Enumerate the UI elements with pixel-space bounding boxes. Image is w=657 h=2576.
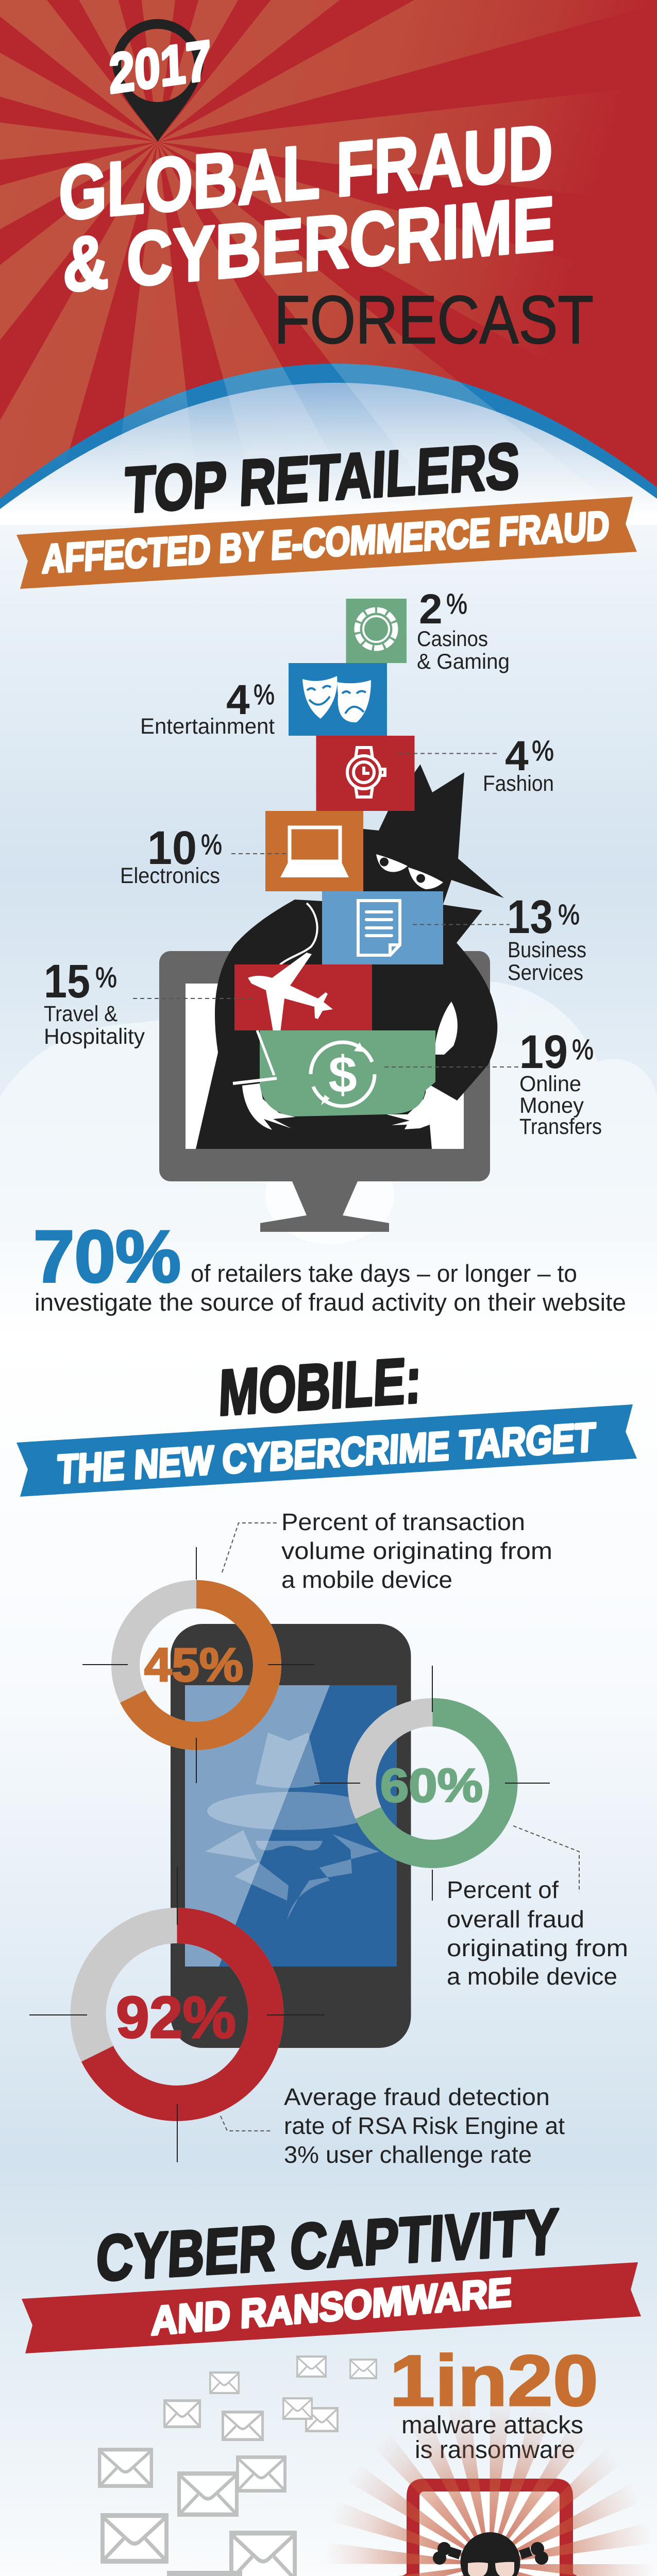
stat: 70 percent: 70% [33,1216,181,1298]
stat: fashion: % [532,734,554,767]
stat: travel: Hospitality [44,1024,145,1049]
stat: online money: Money [519,1093,584,1118]
title: GLOBAL FRAUD [59,109,553,236]
box: travel [234,953,372,1037]
icon: spy on phone screen [205,1733,379,1920]
stat: online money: 19 [519,1026,568,1078]
stat: business services: % [558,898,580,930]
callout: 60 percent: overall fraud [447,1906,584,1933]
callout: 92 percent: rate of RSA Risk Engine at [284,2112,565,2139]
donut: 60 percent: 60% [380,1759,483,1812]
stat: travel: Travel & [44,1002,117,1026]
stat: online money: % [572,1033,594,1065]
arc: blue dome [0,364,657,509]
box: casinos [346,599,407,663]
stat: casinos [417,586,510,673]
stat: electronics: 10 [147,822,197,874]
stat: fashion: Fashion [483,771,554,796]
stat: casinos: & Gaming [417,649,510,673]
stat: entertainment [140,676,275,739]
stat: casinos: Casinos [417,626,488,651]
header: red sunburst [0,0,657,499]
box: business services [322,891,443,964]
box: entertainment [289,663,387,736]
icon: laptop [280,827,349,877]
stat: business services: Business [508,938,586,962]
stat: casinos: % [446,587,467,620]
icon: ransomware envelope [375,2479,604,2576]
heading: top retailers: TOP RETAILERS [123,430,521,527]
callout: 60 percent: Percent of [447,1876,559,1903]
icon: location pin [112,19,204,142]
stat: 70 percent: investigate the source of fraud activity on their website [35,1289,626,1316]
stat: 70 percent: of retailers take days – or longer – to [191,1260,577,1287]
icon: theatre masks [302,676,371,722]
donut: 60 percent [314,1666,550,1901]
donut: 45 percent: 45% [144,1639,243,1691]
burst rays [407,2482,572,2576]
heading: mobile: MOBILE: [217,1344,423,1429]
callout: 60 percent: a mobile device [447,1963,617,1990]
stat: business services [507,891,586,985]
donut: 92 percent: 92% [116,1985,236,2050]
icon: airplane [248,953,333,1037]
stat: entertainment: 4 [226,676,250,723]
callout: 45 percent: Percent of transaction [281,1509,525,1535]
stat: travel [44,955,145,1049]
title: & CYBERCRIME [63,181,555,308]
clouds behind monitor [0,981,657,1244]
box: online money transfers [233,1030,435,1116]
icon: casino chip [357,610,395,648]
callout: 92 percent: Average fraud detection [284,2083,550,2110]
icon: watch [347,748,385,797]
stat: entertainment: Entertainment [140,714,275,739]
title [59,109,594,358]
callout: 45 percent: a mobile device [281,1566,452,1593]
stat: online money: Online [519,1072,581,1096]
swarm of envelopes [53,2357,417,2576]
icon: dollar cycle: $ [328,1046,357,1104]
box: fashion [316,736,414,811]
stat: 1 in 20: 1in20 [390,2340,598,2421]
stat: fashion: 4 [505,733,529,779]
stat: entertainment: % [254,678,275,710]
stat: electronics: Electronics [120,863,220,888]
leader lines: retailers [133,753,524,1067]
stat: travel: % [95,961,117,993]
stat: electronics [120,822,222,888]
stat: 1 in 20: malware attacks [401,2412,583,2439]
callout: 45 percent [222,1509,552,1593]
stat: casinos: 2 [419,586,443,633]
stat: travel: 15 [44,955,90,1008]
monitor [159,951,490,1232]
stat: 1 in 20: is ransomware [415,2436,575,2464]
stat: electronics: % [201,828,222,860]
icon: skull and crossbones [433,2532,548,2576]
stat: online money: Transfers [519,1114,602,1139]
callout: 92 percent: 3% user challenge rate [284,2141,532,2168]
callout: 45 percent: volume originating from [281,1537,552,1564]
stat: online money [519,1026,602,1139]
callout: 60 percent [447,1826,628,1990]
stat: 70 percent [33,1216,626,1316]
ribbon: ransomware: AND RANSOMWARE [151,2269,512,2344]
phone [171,1624,411,2048]
title: FORECAST [274,282,594,358]
stat: 1 in 20 [390,2340,598,2464]
villain figure [196,765,504,1149]
donut: 45 percent [82,1547,314,1783]
stat: fashion [483,733,554,796]
icon: dollar cycle [311,1042,375,1106]
year 2017: 2017 [108,28,212,105]
ribbon: ransomware [22,2262,641,2353]
callout: 60 percent: originating from [447,1935,628,1961]
icon: document [358,901,400,955]
stat: business services: 13 [507,891,553,943]
donut: 92 percent [29,1867,325,2162]
callout: 92 percent [221,2083,565,2168]
stat: business services: Services [508,960,583,985]
box: electronics [265,811,363,891]
